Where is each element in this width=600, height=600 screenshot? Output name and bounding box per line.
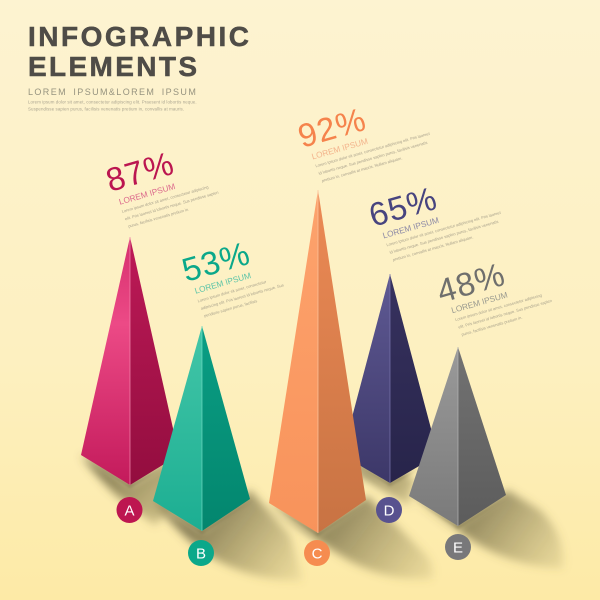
badge A [116, 497, 142, 523]
badge C: C [312, 546, 323, 562]
callout C: 92% [294, 84, 436, 186]
pyramid B [153, 326, 250, 531]
callout A: 87%: Lorem ipsum dolor sit amet, consectetur adipiscing [121, 184, 209, 214]
callout C: 92%: Lorem ipsum dolor sit amet, consectetur adipiscing elit. Pris laoreet [315, 131, 431, 168]
callout D: 65%: Lorem ipsum dolor sit amet, consectetur adipiscing elit. Pris laoreet [386, 210, 502, 247]
badge B [188, 540, 214, 566]
intro text: Suspendisse sapien purus, facilisis venenatis pretium in, convallis at mauris. [28, 106, 184, 112]
badge E: E [453, 540, 463, 556]
callout A: 87% [102, 134, 221, 231]
callout B: 53%: adipiscing elit. Pris laoreet id lobortis neque. Sus [200, 282, 284, 311]
callout C: 92%: pretium in, convallis at mauris. Nullam aliquam. [321, 155, 403, 183]
callout D: 65%: id lobortis neque. Sus pendisse sapien purus, facilisis venenatis [389, 219, 499, 255]
title: ELEMENTS [28, 51, 197, 82]
badge C [304, 540, 330, 566]
badge D: D [384, 502, 395, 520]
callout A: 87%: purus, facilisis venenatis pretium in. [127, 207, 190, 229]
title: INFOGRAPHIC [28, 21, 249, 52]
callout B: 53%: Lorem ipsum dolor sit amet, consectetur [197, 279, 267, 303]
intro text: Lorem ipsum dolor sit amet, consectetur adipiscing elit. Praesent id lobortis neque. [28, 100, 197, 104]
callout D: 65%: pretium in, convallis at mauris. Nullam aliquam. [392, 234, 474, 262]
badge B: B [196, 546, 206, 562]
callout D: 65%: LOREM IPSUM [381, 215, 440, 240]
callout E: 48%: LOREM IPSUM [450, 290, 509, 315]
callout C: 92%: LOREM IPSUM [310, 136, 369, 161]
badge A: A [124, 502, 135, 520]
callout C: 92%: id lobortis neque. Sus pendisse sapien purus, facilisis venenatis [318, 140, 428, 176]
callout B: 53%: LOREM IPSUM [193, 270, 252, 296]
pyramid D [342, 274, 438, 483]
callout A: 87%: 87% [102, 144, 178, 199]
callout E: 48%: 48% [433, 255, 509, 310]
pyramid C [269, 190, 366, 533]
callout E: 48% [433, 245, 555, 340]
pyramid E [409, 347, 506, 526]
callout A: 87%: elit. Pris laoreet id lobortis neque. Sus pendisse sapien [124, 190, 219, 221]
callout B: 53%: pendisse sapien purus, facilisis [203, 298, 258, 318]
title [28, 21, 249, 82]
callout B: 53%: 53% [178, 234, 254, 289]
badge D [376, 497, 402, 523]
callout B: 53% [178, 228, 286, 320]
callout E: 48%: purus, facilisis venenatis pretium in. [461, 315, 523, 337]
callout C: 92%: 92% [294, 100, 370, 155]
callout E: 48%: Lorem ipsum dolor sit amet, consectetur adipiscing [454, 293, 542, 322]
pyramid A [81, 237, 179, 485]
intro text [28, 100, 197, 112]
callout A: 87%: LOREM IPSUM [118, 181, 176, 207]
callout E: 48%: elit. Pris laoreet id lobortis neque. Sus pendisse sapien [458, 298, 552, 330]
cast shadows [81, 455, 563, 581]
subtitle: LOREM IPSUM&LOREM IPSUM [28, 87, 197, 97]
badge E [445, 534, 471, 560]
callout D: 65%: 65% [365, 179, 441, 234]
callout D: 65% [365, 163, 507, 265]
